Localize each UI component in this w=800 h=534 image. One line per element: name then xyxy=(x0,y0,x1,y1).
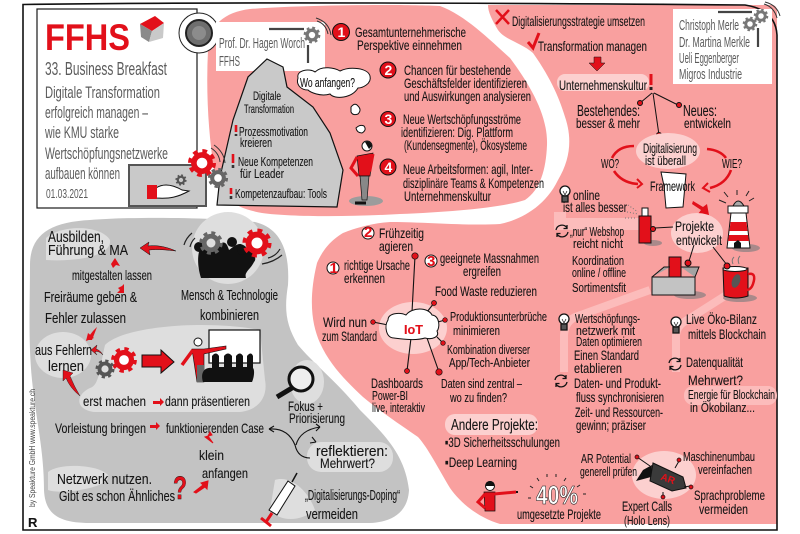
item: geeignete Massnahmen: geeignete Massnahmen xyxy=(440,250,539,266)
event title text: 33. Business Breakfast xyxy=(45,59,167,79)
item: richtige Ursache erkennen: richtige Ursache xyxy=(344,257,410,273)
item 1: Perspektive einnehmen xyxy=(357,37,462,53)
badge 1 xyxy=(332,24,350,40)
illustration: pointing person xyxy=(478,481,518,511)
text: webshop: „nur“ Webshop xyxy=(570,224,624,239)
text block: Daten und Produktfluss: fluss synchronisieren xyxy=(576,389,664,405)
text: Expert Calls xyxy=(622,498,672,528)
text: Netzwerk xyxy=(57,471,175,505)
item 4: Unternehmenskultur xyxy=(404,188,491,204)
badge 2: 2 xyxy=(384,62,392,78)
text: Koordination xyxy=(572,253,626,295)
icon: speaker gear xyxy=(305,18,331,42)
text: Maschinenumbau: Maschinenumbau xyxy=(683,449,755,464)
text: Bestehendes: Bestehendes: xyxy=(577,103,640,120)
text: Freiräume xyxy=(44,289,137,327)
text: Koordination: Koordination xyxy=(572,253,624,268)
text: online: online xyxy=(573,187,600,203)
icon: bulb xyxy=(559,314,569,330)
text: Andere Projekte: ▪Deep Learning xyxy=(445,454,517,470)
text: erst machen dann präsentieren: erst machen xyxy=(83,393,146,409)
IoT label: IoT xyxy=(404,322,423,337)
arrow: gears to lernen xyxy=(91,345,103,355)
text block: Daten und Produktfluss: Zeit- und Ressourcen- xyxy=(575,404,663,420)
node: Digitalisierung ist überall: Digitalisierung xyxy=(643,140,697,156)
item 2: und Auswirkungen analysieren xyxy=(404,88,531,104)
text: WO: WO? xyxy=(601,156,619,171)
callout: Wo anfangen xyxy=(297,68,370,97)
text: Digitalisierungs-Doping: „Digitalisierungs-Doping“ xyxy=(305,487,400,504)
item 1 xyxy=(355,24,466,53)
node: Projekte entwickelt xyxy=(671,213,723,253)
panel: top pink blob xyxy=(207,5,547,216)
text: Wird nun: zum Standard xyxy=(322,328,377,344)
icon: hand xyxy=(147,185,189,199)
contributors names: Migros Industrie xyxy=(679,66,742,83)
illustration: AR headset xyxy=(632,451,696,499)
text: umgesetzte Projekte: umgesetzte Projekte xyxy=(517,506,601,522)
icon: red cross xyxy=(496,10,509,24)
label: Unternehmenskultur xyxy=(557,74,651,93)
text: reflektieren xyxy=(316,443,388,471)
item: geeignete Massnahmen: 3 xyxy=(427,253,435,270)
panel: grey blob xyxy=(30,218,409,523)
node: Digitalisierung ist überall: ist überall xyxy=(645,153,686,168)
gear red xyxy=(245,231,269,255)
item 3: identifizieren: Dig. Plattform xyxy=(401,124,513,140)
text: Mensch & Technologie: Mensch & Technologie xyxy=(181,287,278,304)
text: reflektieren: Mehrwert? xyxy=(320,455,375,471)
text: Koordination: Sortimentsfit xyxy=(572,280,626,295)
item: richtige Ursache erkennen: 1 xyxy=(330,260,338,277)
icon: spray can xyxy=(625,205,662,246)
badge 4 xyxy=(380,159,396,175)
text: Freiräume: Freiräume geben & xyxy=(44,289,137,306)
text: Netzwerk: Netzwerk nutzen. xyxy=(57,471,152,488)
event title text: Digitale Transformation xyxy=(45,83,160,102)
badge 3 xyxy=(380,111,396,127)
icon: red check xyxy=(528,33,539,48)
item 3 xyxy=(401,111,527,153)
icon: coffee cup xyxy=(179,13,219,53)
illustration: rock: Digitale xyxy=(253,91,281,103)
arrow: framework to projects xyxy=(692,201,709,215)
arrow: klein up xyxy=(205,432,213,443)
text: Dashboards: Power-BI xyxy=(372,388,408,403)
text: WIE: WIE? xyxy=(722,156,742,171)
icon: bulb xyxy=(560,186,570,202)
item: Frühzeitig agieren: Frühzeitig xyxy=(379,225,424,241)
text: strategy: Digitalisierungsstrategie umsetzen xyxy=(512,13,645,29)
item: richtige Ursache erkennen: erkennen xyxy=(344,270,385,286)
badge 3: 3 xyxy=(384,111,392,127)
text: Ausbilden: Führung & MA xyxy=(48,242,128,259)
panel: right and central pink blob xyxy=(312,5,777,524)
text: klein anfangen xyxy=(199,447,248,481)
text: Daten sind zentral xyxy=(441,376,523,405)
item 2: Chancen für bestehende xyxy=(404,62,511,78)
node: Projekte entwickelt: Projekte xyxy=(675,218,714,234)
text: Daten sind zentral: wo zu finden? xyxy=(449,390,507,405)
text: erst machen dann präsentieren: dann präsentieren xyxy=(165,393,250,409)
text: Vorleistung: Vorleistung bringen xyxy=(55,420,146,436)
stat: 40% xyxy=(528,474,586,510)
illustration: thinking person xyxy=(349,141,383,206)
text: Sprachprobleme xyxy=(694,487,765,517)
text: Dashboards xyxy=(371,375,425,415)
dots xyxy=(635,455,693,499)
event title text xyxy=(44,59,168,201)
text: klein anfangen: anfangen xyxy=(202,465,248,481)
logo: FFHS: FFHS xyxy=(45,17,130,58)
mind map: culture branches xyxy=(638,93,682,138)
text block: Wertschöpfung: Wertschöpfungs- xyxy=(575,311,640,326)
grey panel highlights xyxy=(35,212,393,519)
node: Digitalisierung ist überall xyxy=(636,133,700,169)
text: Neues xyxy=(683,103,731,131)
text block: Datenqualität: in Ökobilanz... xyxy=(690,400,755,415)
illustration: rock xyxy=(217,59,343,207)
contributors names: Dr. Martina Merkle xyxy=(679,34,750,51)
text: Maschinenumbau xyxy=(683,449,755,477)
event title text: Wertschöpfungsnetzwerke xyxy=(45,144,168,163)
contributors names: Ueli Eggenberger xyxy=(679,50,739,67)
glow xyxy=(379,302,447,354)
text: Ausbilden xyxy=(48,229,128,259)
text block: Öko-Bilanz: mittels Blockchain xyxy=(688,326,766,342)
illustration: rock: Prozessmotivation xyxy=(239,124,308,139)
label: Unternehmenskultur: Unternehmenskultur xyxy=(559,77,647,93)
text: Digitalisierungs-Doping: vermeiden xyxy=(306,506,358,523)
item 4 xyxy=(403,161,544,204)
icon: red gear xyxy=(190,151,214,175)
strip highlight xyxy=(560,212,640,224)
icon: gears xyxy=(744,2,780,30)
arrows: curves xyxy=(269,424,320,458)
text block: Wertschöpfung: Daten optimieren xyxy=(576,334,642,349)
text: Dashboards: Dashboards xyxy=(371,375,423,391)
speaker name xyxy=(219,35,305,70)
arrow: to lernen xyxy=(86,327,97,341)
icon: question mark: ? xyxy=(173,470,187,506)
item 4: disziplinäre Teams & Kompetenzen xyxy=(403,175,544,191)
text block: Wertschöpfung: Einen Standard xyxy=(574,347,639,363)
text: Mensch & Technologie xyxy=(181,287,278,324)
text: AR Potential: AR Potential xyxy=(581,451,631,466)
text: Neues: entwickeln xyxy=(684,115,731,131)
gear grey xyxy=(201,233,221,253)
text: AR Potential xyxy=(580,451,637,479)
text: Fokus xyxy=(288,398,345,426)
text: Expert Calls: Expert Calls xyxy=(622,498,672,514)
numbered list: top blob xyxy=(332,24,544,204)
node: Projekte entwickelt: entwickelt xyxy=(676,232,722,248)
item 3: (Kundensegmente), Ökosysteme xyxy=(404,136,527,153)
text: Koordination: online / offline xyxy=(572,265,626,280)
text block: Daten und Produktfluss: Daten- und Produkt- xyxy=(574,375,661,391)
icon: paper xyxy=(661,172,686,208)
text: Framework: Framework xyxy=(650,178,696,194)
text: Maschinenumbau: vereinfachen xyxy=(698,462,752,477)
illustration: rock: Neue Kompetenzen xyxy=(238,154,313,169)
arrow: to lernen curved xyxy=(63,370,80,396)
icon: gears xyxy=(97,349,135,377)
item: richtige Ursache erkennen xyxy=(327,257,410,286)
icon: magnifier xyxy=(277,367,313,397)
illustration: rock: Kompetenzaufbau: Tools xyxy=(235,186,327,201)
text: webshop: reicht nicht xyxy=(573,236,623,251)
text: Fokus: Fokus + xyxy=(288,398,323,414)
panel: hand illustration xyxy=(129,145,227,206)
text block: Datenqualität: Datenqualität xyxy=(686,354,743,370)
callout: Wo anfangen: Wo anfangen? xyxy=(300,75,355,90)
illustration: rock: für Leader xyxy=(240,166,284,181)
text: Kombination: App/Tech-Anbieter xyxy=(449,355,531,370)
arrow: red up-right xyxy=(194,481,208,493)
text: Andere Projekte: Andere Projekte: xyxy=(451,417,538,434)
item: Frühzeitig agieren: agieren xyxy=(379,238,413,254)
text: aus Fehlern lernen xyxy=(35,342,92,375)
node dots xyxy=(371,253,447,375)
text block: Daten und Produktfluss xyxy=(555,375,664,433)
item 3: Neue Wertschöpfungsströme xyxy=(403,111,521,127)
text block: Daten und Produktfluss: gewinn; präziser xyxy=(576,417,646,433)
event title text: erfolgreich managen – xyxy=(45,103,148,122)
text: Sprachprobleme: Sprachprobleme xyxy=(694,487,765,503)
icon: box with can xyxy=(652,245,727,299)
icon: bulb xyxy=(671,317,681,333)
arrow: big red xyxy=(142,350,174,373)
credit: vertical text: by Speakture GmbH www.speakture.ch xyxy=(28,389,37,507)
text: aus Fehlern lernen: lernen xyxy=(48,358,84,375)
text: erst machen dann präsentieren xyxy=(83,393,250,409)
badge 2 xyxy=(380,62,396,78)
illustration: presentation xyxy=(182,330,260,382)
arrow: people to Ausbilden xyxy=(140,242,176,255)
illustration: rock: kreieren xyxy=(240,135,272,150)
text: Produktion xyxy=(450,309,547,338)
text: Vorleistung: funktionierenden Case xyxy=(166,420,264,436)
text block: Wertschöpfung: etablieren xyxy=(574,360,622,376)
connectors xyxy=(373,256,445,372)
text: Andere Projekte xyxy=(445,414,560,470)
panel: speaker box xyxy=(216,18,331,71)
icon: grey gear xyxy=(209,169,227,187)
arrow: down xyxy=(589,57,605,71)
text: Wird nun: Wird nun xyxy=(323,314,367,330)
item 4: Neue Arbeitsformen: agil, Inter- xyxy=(403,161,533,177)
illustration: AR headset: AR xyxy=(659,472,677,487)
text: Freiräume: Fehler zulassen xyxy=(45,310,126,327)
item 1: Gesamtunternehmerische xyxy=(355,24,466,40)
text: Expert Calls: (Holo Lens) xyxy=(624,513,670,528)
item: geeignete Massnahmen: ergreifen xyxy=(463,263,501,279)
item: Frühzeitig agieren xyxy=(362,224,424,254)
panel: title box xyxy=(37,9,197,208)
text block: Wertschöpfung xyxy=(559,311,642,376)
connectors xyxy=(637,457,690,497)
contributors names: Christoph Merle xyxy=(679,17,739,34)
panel: contributors box xyxy=(673,2,780,84)
logo: signature: R xyxy=(28,515,38,530)
icon: thought bubbles xyxy=(351,104,365,133)
text: Produktion: minimieren xyxy=(453,323,500,338)
text: Food Waste: Food Waste reduzieren xyxy=(435,283,537,299)
speaker name: FFHS xyxy=(219,53,240,70)
text: Kombination: Kombination diverser xyxy=(447,342,530,357)
text: Dashboards: live, interaktiv xyxy=(372,400,425,415)
text: aus Fehlern lernen: aus Fehlern xyxy=(35,342,92,359)
text: webshop xyxy=(556,224,624,251)
illustration: rock: Transformation xyxy=(244,104,294,116)
icon: lighthouse xyxy=(719,190,760,252)
text block: Wertschöpfung: netzwerk mit xyxy=(576,323,635,338)
event title text: 01.03.2021 xyxy=(46,186,88,201)
stat: 40%: 40% xyxy=(536,480,578,510)
icon: logo cube xyxy=(140,16,164,42)
text: Ausbilden: Ausbilden, xyxy=(48,229,104,246)
connector: spray to projects xyxy=(655,227,673,228)
text: Neues: Neues: xyxy=(683,103,717,120)
badge 4: 4 xyxy=(384,159,392,175)
text block: Datenqualität: Mehrwert? xyxy=(688,372,743,388)
text: Bestehendes: besser & mehr xyxy=(576,115,640,131)
text: Daten sind zentral: Daten sind zentral – xyxy=(441,376,523,391)
text: Bestehendes xyxy=(576,103,640,131)
item 2 xyxy=(404,62,531,104)
item: Frühzeitig agieren: 2 xyxy=(364,224,372,241)
text: Fokus: Priorisierung xyxy=(289,410,345,426)
text: Andere Projekte: ▪3D Sicherheitsschulungen xyxy=(445,434,560,450)
contributors names xyxy=(679,17,750,83)
event title text: aufbauen können xyxy=(45,164,120,183)
text: klein anfangen: klein xyxy=(199,447,224,463)
icon: people with gears xyxy=(184,231,282,278)
event title text: wie KMU starke xyxy=(44,123,119,142)
text: online xyxy=(560,186,640,224)
text: Kombination xyxy=(447,342,531,370)
highlight strips xyxy=(564,290,728,372)
text: Wird nun xyxy=(322,314,377,344)
arrow: small xyxy=(111,258,120,268)
central mind map: IoT xyxy=(371,253,447,375)
arrows: red cycle xyxy=(612,146,731,192)
text block: Öko-Bilanz: Live Öko-Bilanz xyxy=(686,310,757,327)
text: Vorleistung xyxy=(55,420,264,436)
text: Mensch & Technologie: kombinieren xyxy=(200,307,259,324)
icon: small gear xyxy=(176,175,186,185)
text block: Datenqualität xyxy=(669,354,777,415)
text: Produktion: Produktionsunterbrüche xyxy=(450,309,547,324)
text: Digitalisierungs-Doping xyxy=(305,487,400,523)
item: geeignete Massnahmen xyxy=(425,250,539,279)
item 2: Geschäftsfelder identifizieren xyxy=(404,75,527,91)
icon: syringe xyxy=(261,473,297,526)
text: transformation: Transformation managen xyxy=(538,38,647,54)
text: online: ist alles besser xyxy=(563,199,627,215)
speaker name: Prof. Dr. Hagen Worch xyxy=(219,35,305,52)
icon: coffee mug xyxy=(723,256,757,302)
arrow: small xyxy=(117,284,124,293)
badge 1: 1 xyxy=(338,24,346,40)
text: mitgestalten: mitgestalten lassen xyxy=(72,267,152,283)
cloud xyxy=(386,309,439,340)
text: Netzwerk: Gibt es schon Ähnliches xyxy=(59,488,175,505)
text: AR Potential: generell prüfen xyxy=(580,464,637,479)
text block: Öko-Bilanz xyxy=(671,310,766,342)
text: reflektieren: reflektieren: xyxy=(316,443,388,460)
text: Sprachprobleme: vermeiden xyxy=(699,501,748,517)
